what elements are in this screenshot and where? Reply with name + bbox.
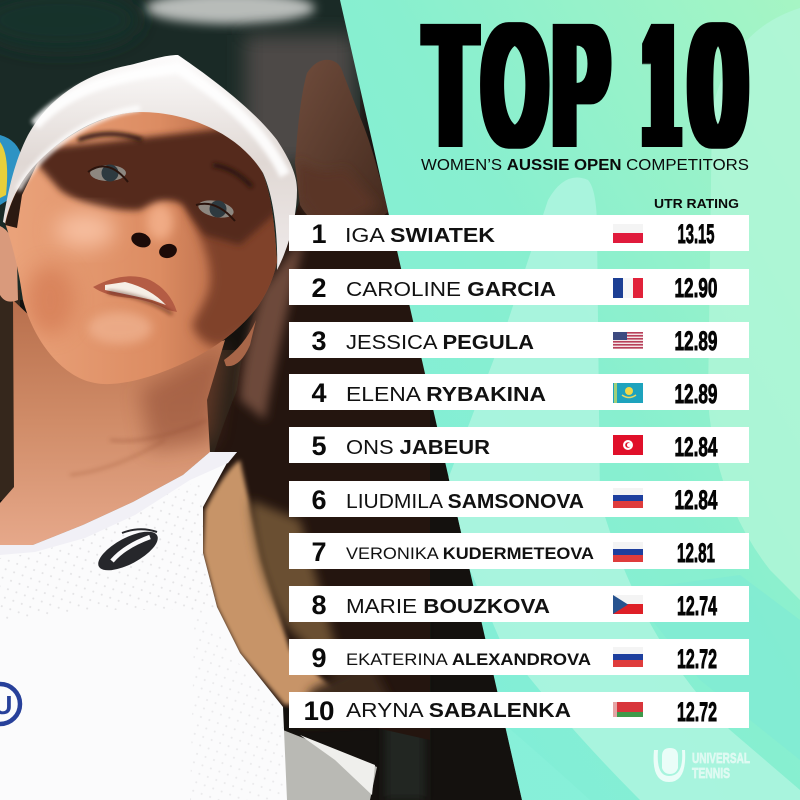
flag: Czech Republic	[613, 595, 643, 614]
logo wordmark: TENNIS	[692, 765, 730, 782]
mint background panel	[340, 0, 800, 800]
row 6	[289, 481, 749, 517]
nostrils	[131, 232, 177, 258]
row 5: 12.84	[674, 432, 718, 462]
photo: Iga Swiatek serving	[0, 0, 430, 800]
flag: Poland	[613, 224, 643, 243]
row 8: MARIE BOUZKOVA	[346, 596, 550, 618]
white shirt	[0, 452, 377, 800]
row 1: 13.15	[678, 219, 714, 249]
row 7: VERONIKA KUDERMETEOVA	[346, 544, 594, 563]
row 2: 12.90	[674, 273, 718, 303]
row 4: 4	[311, 378, 327, 408]
flag: Tunisia	[613, 435, 643, 455]
row 2: CAROLINE GARCIA	[346, 279, 556, 301]
asics logo	[93, 524, 163, 578]
column header: UTR rating: UTR RATING	[654, 196, 739, 211]
watermark shapes	[448, 8, 800, 800]
title	[425, 0, 748, 184]
row 5	[289, 427, 749, 463]
cap	[3, 55, 297, 270]
row 10: ARYNA SABALENKA	[346, 700, 571, 722]
raised arm and hand	[203, 60, 430, 740]
row 3	[289, 322, 749, 358]
row 4: ELENA RYBAKINA	[346, 384, 546, 406]
flag: Russia	[613, 488, 643, 508]
row 6: 12.84	[674, 485, 718, 515]
flag: Russia	[613, 647, 643, 667]
row 3: 3	[311, 326, 327, 356]
blue sponsor badge	[0, 684, 20, 724]
row 7	[289, 533, 749, 569]
row 8: 12.74	[677, 591, 717, 621]
row 5: ONS JABEUR	[346, 437, 491, 459]
row 8	[289, 586, 749, 622]
face	[5, 112, 277, 384]
row 10: 12.72	[677, 697, 717, 727]
mouth	[93, 276, 177, 314]
hair at temple	[5, 162, 38, 228]
row 2: 2	[311, 273, 327, 303]
row 3: 12.89	[674, 326, 718, 356]
row 4: 12.89	[674, 379, 718, 409]
row 2	[289, 269, 749, 305]
row 9: 9	[311, 643, 327, 673]
row 1: IGA SWIATEK	[345, 225, 496, 247]
flag: Kazakhstan	[613, 383, 643, 403]
row 7: 7	[311, 537, 327, 567]
flag: France	[613, 278, 643, 298]
ranking table	[289, 215, 749, 728]
ears	[0, 226, 256, 366]
row 3: JESSICA PEGULA	[346, 332, 534, 354]
row 1: 1	[311, 219, 327, 249]
flag: USA	[613, 332, 643, 349]
row 6: LIUDMILA SAMSONOVA	[346, 491, 584, 513]
row 5: 5	[311, 431, 327, 461]
neck and chest	[0, 300, 225, 545]
left eye	[88, 164, 128, 182]
row 10: 10	[304, 696, 334, 726]
row 8: 8	[311, 590, 327, 620]
racket behind hat	[0, 135, 22, 205]
logo wordmark	[692, 750, 750, 782]
subtitle: WOMEN’S AUSSIE OPEN COMPETITORS	[421, 157, 749, 174]
eyebrows	[78, 134, 252, 187]
row 9: EKATERINA ALEXANDROVA	[346, 650, 591, 669]
row 7: 12.81	[677, 538, 715, 568]
row 9	[289, 639, 749, 675]
logo mark	[654, 748, 685, 782]
flag: Russia	[613, 542, 643, 562]
row 1	[289, 215, 749, 251]
flag: Belarus	[613, 702, 643, 717]
row 6: 6	[311, 485, 327, 515]
logo wordmark: UNIVERSAL	[692, 750, 750, 767]
row 10	[289, 692, 749, 728]
row 4	[289, 374, 749, 410]
row 9: 12.72	[677, 644, 717, 674]
right eye	[196, 197, 235, 221]
logo: Universal Tennis	[654, 748, 750, 782]
